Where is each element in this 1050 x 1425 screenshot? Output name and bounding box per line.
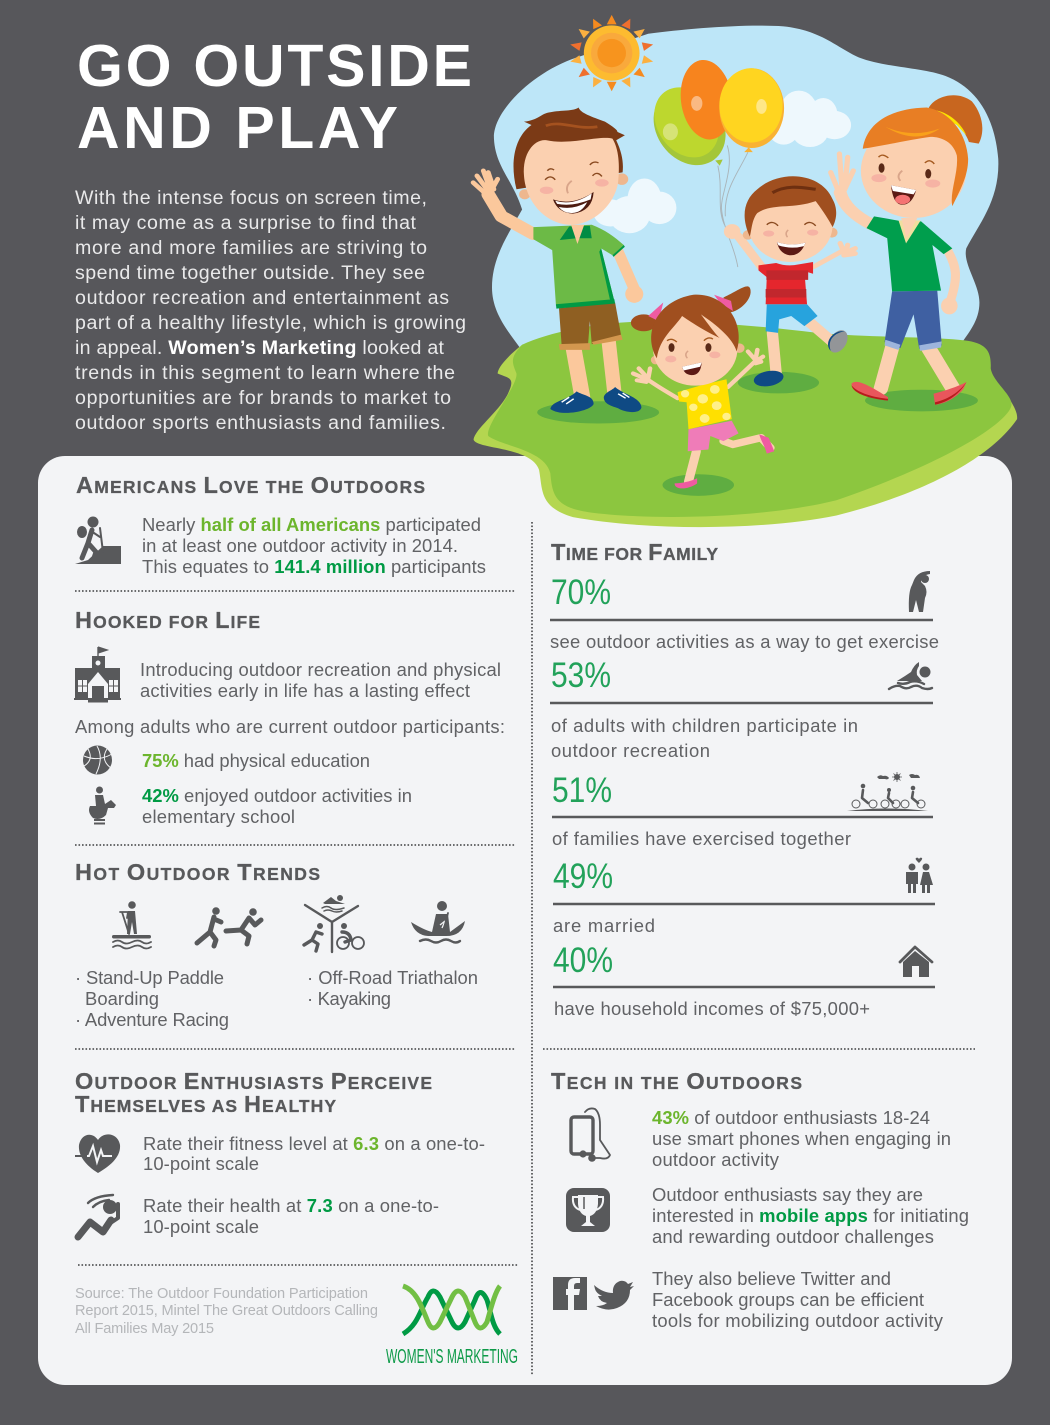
boy <box>724 176 855 389</box>
icon: twitter <box>594 1281 634 1310</box>
logo: Women's Marketing <box>386 1286 518 1368</box>
heading: time for family: TIME FOR FAMILY <box>551 539 718 565</box>
text: introducing outdoor recreation <box>140 659 501 701</box>
text: 75 percent: 75% had physical education <box>142 750 370 771</box>
icon: swimmer <box>889 662 932 689</box>
text: 42 percent <box>142 785 412 827</box>
intro paragraph: part of a healthy lifestyle, which is growing <box>75 312 466 334</box>
text: half of all Americans <box>142 514 486 577</box>
text: half of all Americans: This equates to 141.4 million participants <box>142 556 486 577</box>
heading: Americans love the outdoors: AMERICANS LOVE THE OUTDOORS <box>76 472 425 498</box>
text: fitness level: Rate their fitness level at 6.3 on a one-to- <box>143 1133 485 1154</box>
stat: 70 percent <box>550 573 939 652</box>
text: mobile apps: interested in mobile apps for initiating <box>652 1205 969 1226</box>
icon: triathlon <box>304 895 364 952</box>
stat: 49 percent <box>553 857 935 936</box>
icon: kayak <box>411 901 465 942</box>
source note: Source: The Outdoor Foundation Participation <box>75 1286 368 1302</box>
mother <box>831 95 982 405</box>
stat: 40 percent: 40% <box>553 941 613 980</box>
text: 42 percent: 42% enjoyed outdoor activities in <box>142 785 412 806</box>
white content panel <box>38 456 1012 1385</box>
text: 43 percent <box>652 1107 951 1170</box>
intro paragraph: spend time together outside. They see <box>75 262 425 284</box>
text: mobile apps: Outdoor enthusiasts say they are <box>652 1184 923 1205</box>
heading: outdoor enthusiasts: OUTDOOR ENTHUSIASTS PERCEIVE <box>75 1068 432 1094</box>
icon: hiker <box>75 516 121 564</box>
icon: smartphone with earbuds <box>571 1108 610 1162</box>
icon: heart with pulse <box>75 1134 120 1173</box>
icon: spring rider <box>89 786 116 824</box>
text: twitter and facebook: tools for mobilizing outdoor activity <box>652 1310 944 1331</box>
text: 43 percent: 43% of outdoor enthusiasts 18-24 <box>652 1107 930 1128</box>
list: trends left: · Stand-Up Paddle <box>75 967 224 988</box>
heading: outdoor enthusiasts: THEMSELVES AS HEALTHY <box>75 1091 336 1117</box>
icon: school <box>74 647 121 702</box>
list: trends left: Boarding <box>85 988 159 1009</box>
text: half of all Americans: in at least one outdoor activity in 2014. <box>142 535 458 556</box>
heading: tech in the outdoors: TECH IN THE OUTDOORS <box>551 1068 802 1094</box>
stat: 53 percent: of adults with children participate in <box>551 715 858 736</box>
icon: paddle boarder <box>112 901 151 948</box>
intro paragraph: more and more families are striving to <box>75 237 427 259</box>
clouds <box>594 91 851 233</box>
icon: stretching person <box>909 571 930 612</box>
sky blob <box>492 26 998 348</box>
icon: couple <box>906 858 933 893</box>
text: introducing outdoor recreation: activities early in life has a lasting effect <box>140 680 470 701</box>
balloons <box>640 58 784 267</box>
intro paragraph <box>75 187 466 434</box>
stat: 51 percent: of families have exercised together <box>552 828 851 849</box>
intro paragraph: opportunities are for brands to market to <box>75 387 451 409</box>
girl <box>631 286 774 488</box>
text: twitter and facebook <box>652 1268 944 1331</box>
list: trends left: · Adventure Racing <box>75 1009 229 1030</box>
stat: 49 percent: 49% <box>553 857 613 896</box>
icon: house <box>900 947 932 977</box>
heading: hooked for life: HOOKED FOR LIFE <box>75 607 260 633</box>
intro paragraph: in appeal. Women’s Marketing looked at <box>75 337 445 359</box>
intro paragraph: it may come as a surprise to find that <box>75 212 417 234</box>
stat: 53 percent: 53% <box>551 656 611 695</box>
text: fitness level <box>143 1133 485 1174</box>
illustration: family playing outside <box>473 15 1017 527</box>
source note: Report 2015, Mintel The Great Outdoors Calling <box>75 1303 378 1319</box>
stat: 53 percent: outdoor recreation <box>551 740 710 761</box>
icon: sit-up <box>78 1195 118 1237</box>
text: introducing outdoor recreation: Introducing outdoor recreation and physical <box>140 659 501 680</box>
icon: trophy <box>566 1188 610 1232</box>
title: GO OUTSIDE <box>77 33 472 99</box>
icon: runners <box>197 907 261 946</box>
source note: All Families May 2015 <box>75 1321 214 1337</box>
list: trends left <box>75 967 229 1030</box>
dad <box>473 107 643 413</box>
text: half of all Americans: Nearly half of all Americans participated <box>142 514 481 535</box>
heading: hot outdoor trends: HOT OUTDOOR TRENDS <box>75 859 320 885</box>
text: fitness level: 10-point scale <box>143 1153 259 1174</box>
stat: 70 percent: see outdoor activities as a way to get exercise <box>550 631 939 652</box>
intro paragraph: With the intense focus on screen time, <box>75 187 427 209</box>
grass <box>474 321 1017 527</box>
heading: outdoor enthusiasts <box>75 1068 432 1117</box>
intro paragraph: outdoor sports enthusiasts and families. <box>75 412 446 434</box>
stat: 40 percent: have household incomes of $75,000+ <box>554 998 870 1019</box>
text: 42 percent: elementary school <box>142 806 295 827</box>
list: trends right <box>307 967 478 1009</box>
text: mobile apps: and rewarding outdoor challenges <box>652 1226 934 1247</box>
list: trends right: · Off-Road Triathalon <box>307 967 478 988</box>
intro paragraph: outdoor recreation and entertainment as <box>75 287 449 309</box>
text: health: Rate their health at 7.3 on a one-to- <box>143 1195 439 1216</box>
text: twitter and facebook: Facebook groups can be efficient <box>652 1289 924 1310</box>
sun <box>569 15 654 91</box>
title <box>77 33 472 161</box>
text: health <box>143 1195 439 1237</box>
text: 43 percent: outdoor activity <box>652 1149 780 1170</box>
stat: 53 percent <box>550 656 933 761</box>
text: 43 percent: use smart phones when engaging in <box>652 1128 951 1149</box>
stat: 51 percent: 51% <box>552 771 612 810</box>
title: AND PLAY <box>77 95 398 161</box>
stat: 49 percent: are married <box>553 915 655 936</box>
intro paragraph: trends in this segment to learn where the <box>75 362 455 384</box>
icon: family on bikes <box>847 772 928 811</box>
text: among adults: Among adults who are current outdoor participants: <box>75 716 505 737</box>
list: trends right: · Kayaking <box>307 988 391 1009</box>
text: mobile apps <box>652 1184 969 1247</box>
icon: facebook <box>553 1277 587 1310</box>
stat: 40 percent <box>553 941 935 1019</box>
stat: 51 percent <box>552 771 933 849</box>
source note <box>75 1286 378 1337</box>
stat: 70 percent: 70% <box>551 573 611 612</box>
text: health: 10-point scale <box>143 1216 259 1237</box>
icon: basketball <box>83 746 112 774</box>
logo: Women's Marketing: WOMEN'S MARKETING <box>386 1346 518 1368</box>
text: twitter and facebook: They also believe Twitter and <box>652 1268 891 1289</box>
